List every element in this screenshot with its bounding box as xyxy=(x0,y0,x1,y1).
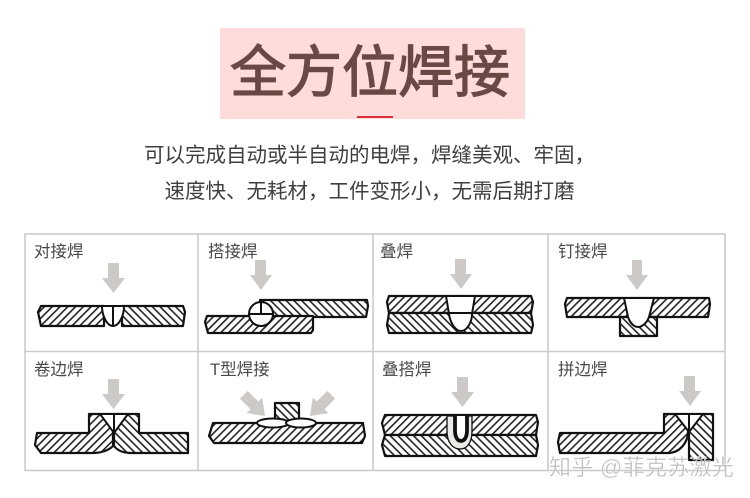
panel: lap weld xyxy=(205,242,368,333)
panel: butt weld: 对接焊 xyxy=(34,242,84,261)
panel: butt weld xyxy=(34,242,185,326)
panel: stack weld xyxy=(380,242,533,333)
panel: stack weld: 叠焊 xyxy=(380,242,413,261)
panel: flange weld: 卷边焊 xyxy=(34,360,84,379)
title accent line xyxy=(357,116,393,118)
panel: plug weld: 钉接焊 xyxy=(558,242,608,261)
description text: 速度快、无耗材，工件变形小，无需后期打磨 xyxy=(164,180,574,203)
panel: plug weld xyxy=(558,242,710,336)
panel: lap weld: 搭接焊 xyxy=(208,242,258,261)
watermark: 知乎 @菲克苏激光 xyxy=(549,455,734,480)
description text xyxy=(144,144,595,203)
description text: 可以完成自动或半自动的电焊，焊缝美观、牢固， xyxy=(144,144,595,167)
panel: T weld: T型焊接 xyxy=(210,360,270,379)
grid table xyxy=(25,234,725,470)
panel: stack lap weld: 叠搭焊 xyxy=(382,360,432,379)
panel: flange weld xyxy=(34,360,188,453)
panel: T weld xyxy=(209,360,365,443)
panel: stack lap weld xyxy=(382,360,538,456)
panel: edge weld: 拼边焊 xyxy=(558,360,608,379)
title banner xyxy=(220,28,525,119)
panel: edge weld xyxy=(558,360,713,460)
title banner: 全方位焊接 xyxy=(230,41,510,104)
